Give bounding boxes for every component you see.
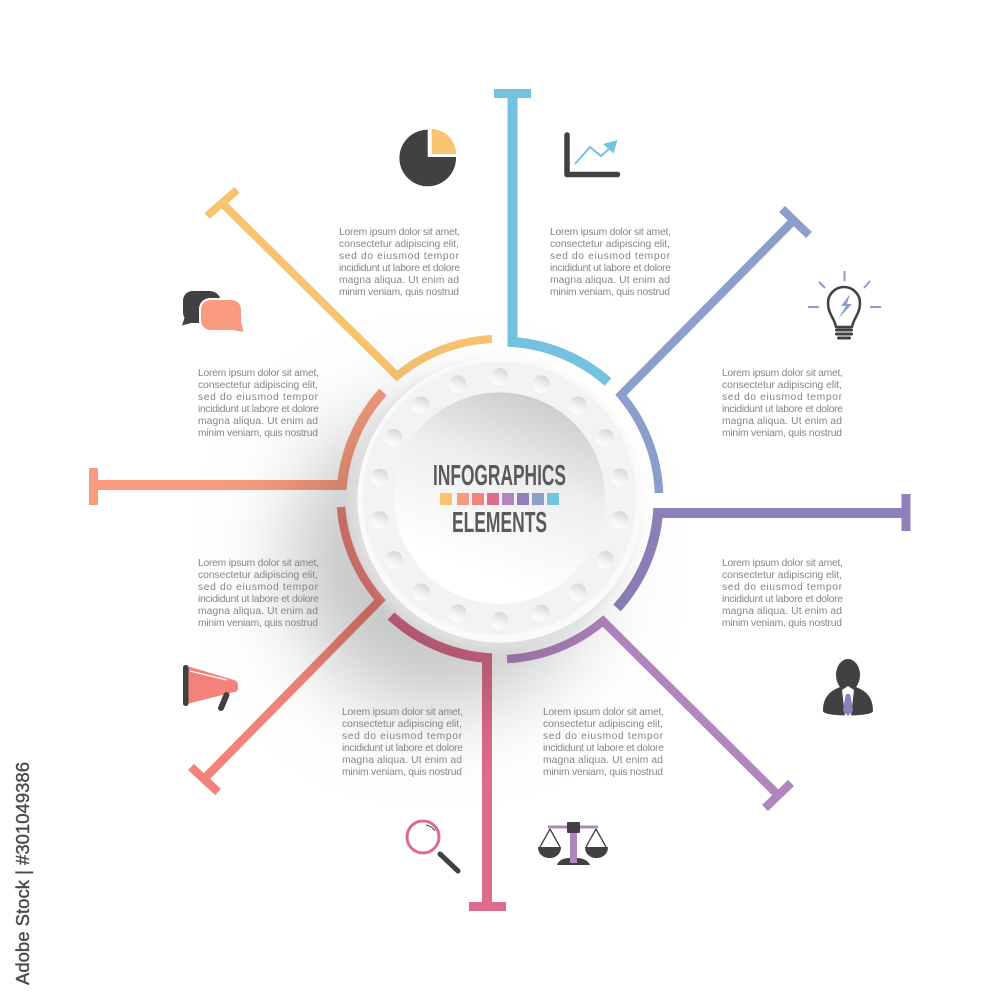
text block: left lower [198,558,319,629]
colour squares [440,493,559,505]
text block: top right [550,227,671,298]
text block: left upper: minim veniam, quis nostrud [198,428,318,439]
text block: right upper: sed do eiusmod tempor [722,392,843,403]
stock credit: Adobe Stock | #301049386 [13,762,33,985]
text block: left upper: sed do eiusmod tempor [198,392,319,403]
text block: right upper: Lorem ipsum dolor sit amet, [722,368,843,379]
disc shadow [290,365,635,710]
text block: right upper: magna aliqua. Ut enim ad [722,416,842,427]
title: INFOGRAPHICS [433,460,566,492]
text block: bottom right: consectetur adipiscing elit, [543,719,663,730]
text block: bottom left: incididunt ut labore et dolore [342,743,463,754]
text block: left upper: Lorem ipsum dolor sit amet, [198,368,319,379]
text block: bottom left: minim veniam, quis nostrud [342,767,462,778]
text block: left lower: incididunt ut labore et dolore [198,594,319,605]
connector: violet [507,621,791,808]
text block: bottom right: minim veniam, quis nostrud [543,767,663,778]
text block: bottom right: Lorem ipsum dolor sit amet, [543,707,664,718]
text block: top right: magna aliqua. Ut enim ad [550,275,670,286]
text block: right lower: magna aliqua. Ut enim ad [722,606,842,617]
ring of dots [371,368,628,629]
text block: top left: minim veniam, quis nostrud [339,287,459,298]
text block: top right: incididunt ut labore et dolore [550,263,671,274]
icon: magnifier [407,821,458,871]
text block: left lower: minim veniam, quis nostrud [198,618,318,629]
title [433,460,566,539]
inner recess [394,392,605,604]
icon: speech bubbles [182,291,244,332]
title: ELEMENTS [452,507,547,539]
central disc [358,358,642,642]
icon: line chart [567,135,618,174]
text block: top right: minim veniam, quis nostrud [550,287,670,298]
text block: top right: sed do eiusmod tempor [550,251,671,262]
text block: top right: consectetur adipiscing elit, [550,239,670,250]
text block: left lower: sed do eiusmod tempor [198,582,319,593]
text block: bottom right [543,707,664,778]
text block: left lower: magna aliqua. Ut enim ad [198,606,318,617]
text block: bottom left: magna aliqua. Ut enim ad [342,755,462,766]
text block: top left: consectetur adipiscing elit, [339,239,459,250]
text block: top right: Lorem ipsum dolor sit amet, [550,227,671,238]
text block: left lower: consectetur adipiscing elit, [198,570,318,581]
text block: bottom left [342,707,463,778]
text block: top left: incididunt ut labore et dolore [339,263,460,274]
connector: slate blue [621,209,809,493]
connector: blue [494,93,608,382]
text block: bottom right: incididunt ut labore et dolore [543,743,664,754]
icon: megaphone [183,665,238,708]
text block: bottom left: consectetur adipiscing elit, [342,719,462,730]
connector: peach [93,392,383,505]
text block: right upper: incididunt ut labore et dolore [722,404,843,415]
text block: top left: magna aliqua. Ut enim ad [339,275,459,286]
text block: left upper: consectetur adipiscing elit, [198,380,318,391]
connector: yellow [207,190,492,376]
text block: bottom right: magna aliqua. Ut enim ad [543,755,663,766]
icon: light bulb [808,271,881,338]
text block: right upper: minim veniam, quis nostrud [722,428,842,439]
text block: bottom right: sed do eiusmod tempor [543,731,664,742]
text block: right lower: minim veniam, quis nostrud [722,618,842,629]
icon: pie chart [399,129,456,186]
text block: top left: sed do eiusmod tempor [339,251,460,262]
text block: right lower: consectetur adipiscing elit, [722,570,842,581]
icon: scales [538,822,608,865]
text block: left upper: incididunt ut labore et dolore [198,404,319,415]
text block: left upper [198,368,319,439]
connector: pink [391,616,506,909]
text block: top left [339,227,460,298]
text block: right upper: consectetur adipiscing elit, [722,380,842,391]
connector: purple [617,494,906,608]
icon: businessman [823,659,873,716]
connector: red [191,507,380,792]
text block: right lower [722,558,843,629]
text block: left lower: Lorem ipsum dolor sit amet, [198,558,319,569]
text block: right lower: Lorem ipsum dolor sit amet, [722,558,843,569]
text block: right lower: incididunt ut labore et dolore [722,594,843,605]
text block: bottom left: sed do eiusmod tempor [342,731,463,742]
text block: top left: Lorem ipsum dolor sit amet, [339,227,460,238]
text block: left upper: magna aliqua. Ut enim ad [198,416,318,427]
text block: bottom left: Lorem ipsum dolor sit amet, [342,707,463,718]
text block: right upper [722,368,843,439]
text block: right lower: sed do eiusmod tempor [722,582,843,593]
